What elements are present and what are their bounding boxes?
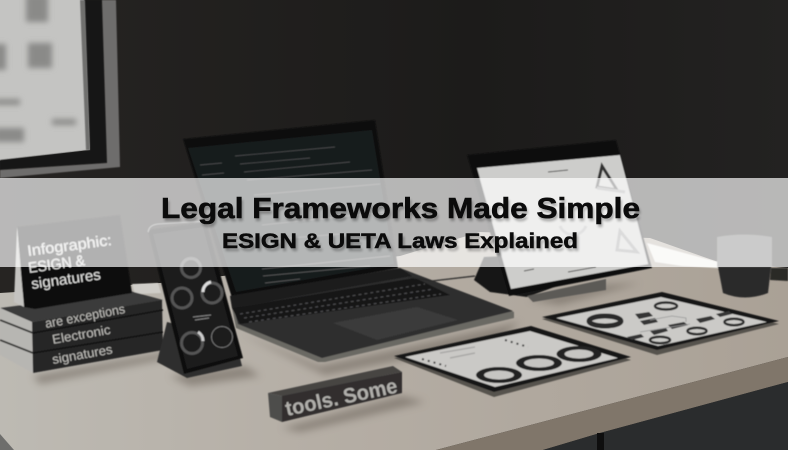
standing tablet [467,140,652,302]
translucent banner [0,178,788,267]
subtitle: ESIGN & UETA Laws Explained [222,230,578,253]
desk front edge [436,357,788,450]
placard text [26,232,113,293]
title group [161,193,642,256]
desk leg [597,433,604,450]
desk surface [0,232,788,450]
window [0,0,120,178]
wooden block [268,366,402,422]
placard [14,215,132,309]
laptop [183,120,514,362]
flat tablet: flow diagram [542,292,779,355]
book spine labels: Electronic [51,322,112,347]
title shadow: ESIGN & UETA Laws Explained [224,233,580,256]
flat tablet: donut charts [394,326,631,397]
book spine labels: are exceptions [44,301,127,331]
book spine labels: signatures [51,342,114,367]
title shadow: Legal Frameworks Made Simple [162,196,642,228]
placard text: ESIGN & [27,252,86,277]
title shadow [162,196,642,256]
placard text: signatures [30,266,102,293]
floor under desk [543,382,788,450]
book spine labels [44,301,127,367]
phone and stand [148,221,243,378]
placard text: Infographic: [26,232,113,260]
paper [647,243,718,268]
desk corner [0,434,14,450]
books stack [0,283,163,373]
mug [717,234,788,298]
object shadows [33,283,640,432]
block text: tools. Some [283,375,400,421]
title: Legal Frameworks Made Simple [161,193,640,225]
